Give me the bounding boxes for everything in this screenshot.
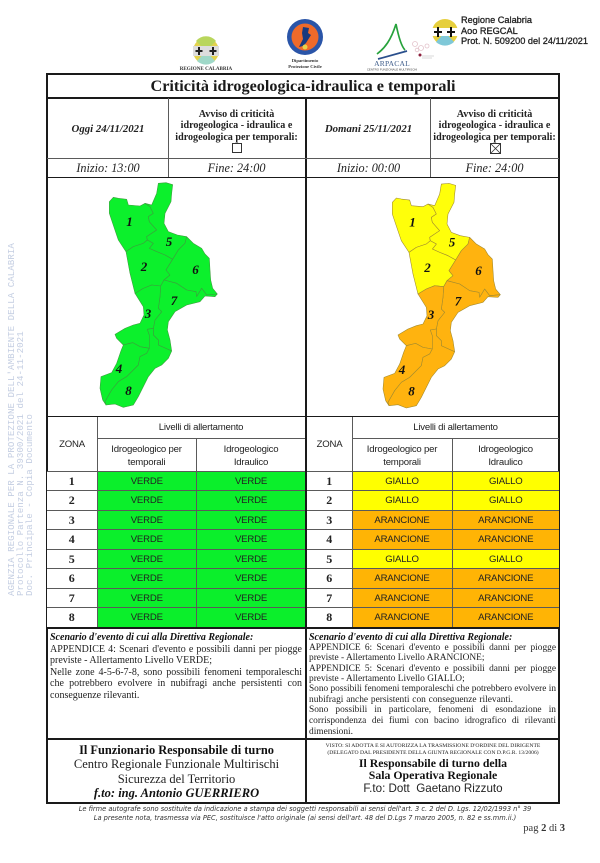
text block: tomorrow scenario [309,632,556,737]
map: today, all zones green: 8 [125,383,132,398]
row zone 2: VERDE [131,495,163,506]
text block: today scenario: Nelle zone 4-5-6-7-8, sono possibili fenomeni temporaleschi [50,666,302,678]
footer note [79,804,531,822]
table: tomorrow alert levels [307,417,559,627]
notice: today [175,108,298,142]
row zone 6: 6 [326,571,332,585]
title: Criticità idrogeologica-idraulica e temporali [151,77,455,95]
row zone 7: VERDE [235,592,267,604]
signature block: today [74,743,279,800]
notice: tomorrow: idrogeologica - idraulica e [439,120,550,131]
structural lines [47,97,559,98]
column header: hydraulic: Idraulico [488,457,523,468]
levels header: Livelli di allertamento [413,422,498,433]
stamp text: Prot. N. 509200 del 24/11/2021 [461,36,588,46]
row zone 3: ARANCIONE [374,514,430,526]
column header: thunderstorms: Idrogeologico per [367,444,437,455]
row zone 2: GIALLO [385,495,419,506]
map: today, all zones green: 1 [126,214,133,229]
table: today alert levels [47,417,305,627]
text block: tomorrow scenario: previste - Allertamento Livello ARANCIONE; [309,653,484,663]
row zone 1: 1 [326,474,332,488]
row zone 7: VERDE [131,592,163,604]
row zone 1 [47,472,305,490]
notice: tomorrow: Avviso di criticità [457,108,532,120]
row zone 6 [47,569,305,588]
empty checkbox [232,143,242,153]
date: today: Oggi 24/11/2021 [72,123,144,135]
row zone 4: 4 [326,532,332,546]
row zone 2 [47,491,305,510]
text block: tomorrow scenario: nubifragi anche persistenti con conseguenze rilevanti. [309,695,513,705]
map: today, all zones green: 4 [115,361,123,376]
row zone 1: GIALLO [385,476,419,486]
text block: today scenario [50,632,302,701]
map: tomorrow, zones yellow and orange: 1 [409,214,416,230]
row zone 5 [307,550,559,568]
logo: ARPACAL [367,24,434,72]
stamp text: Aoo REGCAL [461,26,518,36]
row zone 8: VERDE [131,612,163,623]
end time: today: Fine: 24:00 [208,161,265,175]
row zone 5 [47,550,305,568]
signature block: tomorrow: F.to: Dott Gaetano Rizzuto [363,782,503,794]
watermark: protocol stamp [6,243,35,596]
icon: Regione Calabria stamp emblem [432,19,458,46]
row zone 4: ARANCIONE [374,534,430,545]
column header: thunderstorms: Idrogeologico per [111,444,182,455]
row zone 8 [47,608,305,627]
row zone 3 [47,511,305,529]
footer note: La presente nota, trasmessa via PEC, sostituisce l'atto originale (ai sensi dell'art. 48 del D.Lgs 7 marzo 2005, n. 82 e ss.mm.ii.) [94,814,516,822]
panel: today header [72,108,298,175]
column header: thunderstorms: temporali [383,457,421,468]
start time: tomorrow: Inizio: 00:00 [337,161,400,175]
stamp text [460,15,588,46]
zone header: ZONA [59,439,85,450]
table grid lines [47,470,305,627]
notice: today: idrogeologica - idraulica e [181,120,292,131]
row zone 3: 3 [69,512,75,526]
row zone 1: GIALLO [489,476,522,486]
map: tomorrow, zones yellow and orange: 7 [455,294,462,308]
map: today, all zones green: 5 [166,234,173,249]
text block: today scenario: previste - Allertamento Livello VERDE; [50,655,212,666]
row zone 3: ARANCIONE [478,514,533,526]
logo: Regione Calabria: REGIONE CALABRIA [180,66,233,72]
watermark: protocol stamp: Protocollo Partenza N. 39300/2021 del 24-11-2021 [15,331,26,596]
logo: ARPACAL: ARPACAL [374,59,410,68]
row zone 1: 1 [69,474,75,488]
text block: today scenario: APPENDICE 4: Scenari d'evento e possibili danni per piogge [50,644,302,655]
row zone 1 [307,472,559,490]
signature block: today: Sicurezza del Territorio [118,772,235,786]
panel: tomorrow header [324,108,556,175]
column header: hydraulic: Idraulico [234,457,268,468]
row zone 5: 5 [69,552,75,566]
row zone 4: 4 [69,532,75,546]
logo: Dipartimento Protezione Civile: Protezione Civile [288,64,322,69]
column header: hydraulic [478,444,533,468]
row zone 1: VERDE [131,476,163,486]
text block: tomorrow scenario: APPENDICE 6: Scenari d'evento e possibili danni per piogge [309,643,556,653]
row zone 8: 8 [326,610,332,624]
notice: today: Avviso di criticità [199,108,274,120]
row zone 7: 7 [326,590,332,604]
row zone 8: ARANCIONE [478,612,533,623]
text block: tomorrow scenario: previste - Allertamento Livello GIALLO; [309,674,465,684]
row zone 7: 7 [69,590,75,604]
row zone 6: VERDE [131,573,163,584]
map: tomorrow, zones yellow and orange: 5 [449,234,456,250]
page number: pag 2 di 3 [523,823,565,834]
row zone 7 [307,589,559,607]
map: today, all zones green: 2 [140,259,148,274]
signature block: tomorrow: Sala Operativa Regionale [369,768,497,782]
column header: hydraulic: Idrogeologico [224,444,278,455]
row zone 3: VERDE [131,514,163,526]
notice: tomorrow: idrogeologica per temporali: [433,132,556,142]
signature block: today: Centro Regionale Funzionale Multirischi [74,757,279,771]
signature block: tomorrow: Il Responsabile di turno della [359,756,507,770]
row zone 3 [307,511,559,529]
stamp text: Regione Calabria [461,15,532,25]
row zone 6: 6 [69,571,75,585]
levels header: Livelli di allertamento [159,422,243,433]
row zone 7: ARANCIONE [478,592,533,604]
map: tomorrow, zones yellow and orange: 3 [427,307,435,322]
map: today, all zones green: 7 [171,293,178,308]
row zone 8: 8 [69,610,75,624]
logo: Dipartimento Protezione Civile: Dipartimento [292,58,319,63]
logo: ARPACAL: CENTRO FUNZIONALE MULTIRISCHI [367,68,417,72]
text block: today scenario: Scenario d'evento di cui alla Direttiva Regionale: [50,632,253,643]
text block: today scenario: conseguenze rilevanti. [50,690,139,701]
row zone 1: VERDE [235,476,267,486]
row zone 8: ARANCIONE [374,612,430,623]
column header: thunderstorms: temporali [128,457,165,468]
row zone 8: VERDE [235,612,267,623]
row zone 8 [307,608,559,627]
row zone 4: VERDE [235,534,267,545]
text block: tomorrow scenario: Sono possibili fenomeni temporaleschi che potrebbero evolvere in [309,684,556,694]
row zone 5: GIALLO [489,554,522,564]
row zone 6: VERDE [235,573,267,584]
column header: thunderstorms [111,444,182,468]
row zone 4 [307,530,559,549]
row zone 4: ARANCIONE [478,534,533,545]
signature block: tomorrow [326,743,540,794]
signature block: today: Il Funzionario Responsabile di turno [79,743,274,757]
text block: today scenario: che potrebbero evolvere in nubifragi anche persistenti con [50,678,302,689]
map: today, all zones green: 3 [144,306,152,321]
signature block: tomorrow: VISTO: SI ADOTTA E SI AUTORIZZA LA TRASMISSIONE D'ORDINE DEL DIRIGENTE [326,743,540,749]
row zone 5: GIALLO [385,554,419,564]
row zone 5: VERDE [131,554,163,564]
map: tomorrow, zones yellow and orange: 8 [408,384,415,398]
row zone 5: VERDE [235,554,267,564]
text block: tomorrow scenario: Scenario d'evento di cui alla Direttiva Regionale: [309,632,512,642]
text block: tomorrow scenario: dimensioni. [309,727,353,737]
row zone 4: VERDE [131,534,163,545]
start time: today: Inizio: 13:00 [76,161,140,175]
logo: Dipartimento Protezione Civile [287,19,323,69]
row zone 2 [307,491,559,510]
end time: tomorrow: Fine: 24:00 [466,161,523,175]
watermark: protocol stamp: AGENZIA REGIONALE PER LA PROTEZIONE DELL'AMBIENTE DELLA CALABRIA [6,243,17,596]
column header: hydraulic [224,444,278,468]
zone header: ZONA [317,439,342,450]
main form frame [46,73,560,804]
row zone 2: GIALLO [489,495,522,506]
signature block: tomorrow: (DELEGATO DAL PRESIDENTE DELLA GIUNTA REGIONALE CON D.P.G.R. 13/2006) [327,750,539,756]
footer note: Le firme autografe sono sostituite da indicazione a stampa dei soggetti responsabili ai sensi dell'art. 3 c. 2 del D. Lgs. 12/02/1993 n° 39 [79,804,531,812]
row zone 7: ARANCIONE [374,592,430,604]
logo: Regione Calabria [180,36,233,72]
row zone 2: VERDE [235,495,267,506]
protocol stamp: logo and text [432,15,588,46]
notice: today: idrogeologica per temporali: [175,132,298,142]
row zone 3: 3 [326,512,332,526]
map: tomorrow, zones yellow and orange: 2 [423,260,431,275]
column header: thunderstorms [367,444,438,468]
text block: tomorrow scenario: APPENDICE 5: Scenari d'evento e possibili danni per piogge [309,664,556,674]
table grid lines [307,470,559,627]
checked checkbox [490,143,501,154]
row zone 6: ARANCIONE [478,573,533,584]
map: tomorrow, zones yellow and orange: 4 [398,362,406,377]
text block: tomorrow scenario: corrispondenza dei fiumi con bacino idrografico di rilevanti [309,716,556,726]
notice: tomorrow [433,108,556,142]
map: today, all zones green: 6 [192,262,199,277]
row zone 6: ARANCIONE [374,573,430,584]
row zone 6 [307,569,559,588]
row zone 7 [47,589,305,607]
date: tomorrow: Domani 25/11/2021 [325,123,412,135]
column header: hydraulic: Idrogeologico [478,444,533,455]
row zone 3: VERDE [235,514,267,526]
signature block: today: f.to: ing. Antonio GUERRIERO [94,786,259,800]
map: tomorrow, zones yellow and orange: 6 [475,263,482,278]
row zone 5: 5 [326,552,332,566]
row zone 4 [47,530,305,549]
text block: tomorrow scenario: Sono possibili in particolare, fenomeni di esondazione in [309,705,556,715]
watermark: protocol stamp: Doc. Principale - Copia Documento [24,414,35,596]
row zone 2: 2 [69,493,75,507]
row zone 2: 2 [326,493,332,507]
